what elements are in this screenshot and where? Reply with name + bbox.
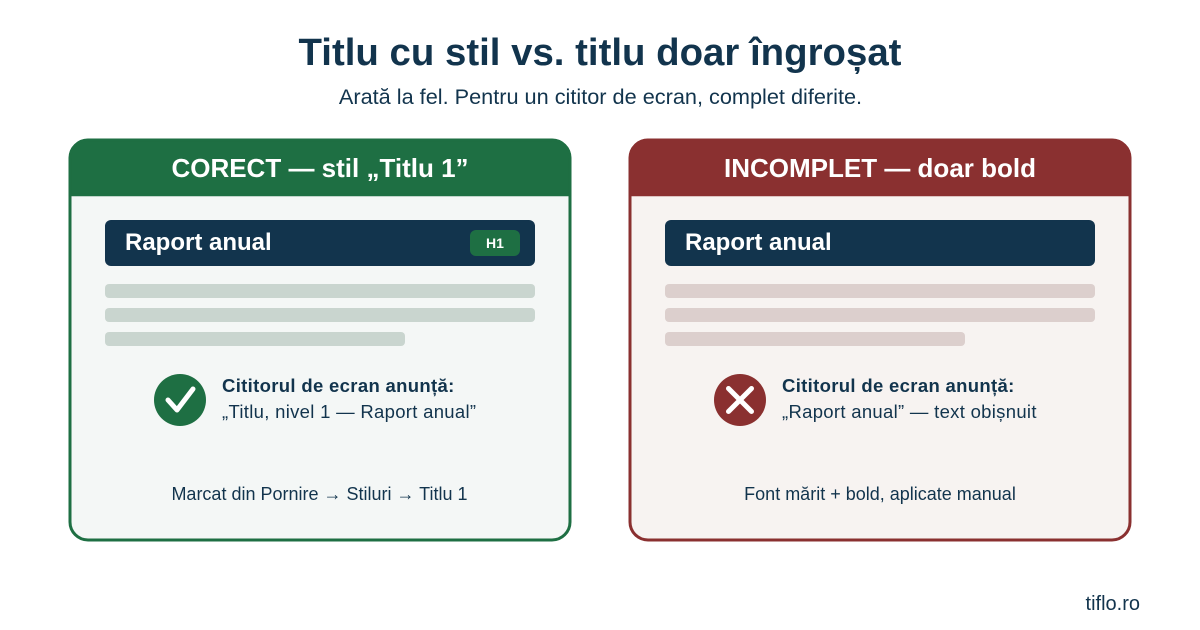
panel header: incomplete: INCOMPLET — doar bold [724,153,1036,183]
heading bar: Raport anual with H1 [105,220,535,266]
panel header: correct: CORECT — stil „Titlu 1” [171,153,469,183]
placeholder text lines [105,284,535,346]
subtitle: Arată la fel. Pentru un cititor de ecran, complet diferite. [339,84,862,109]
screen reader announcement: correct: Cititorul de ecran anunță: [222,375,455,396]
screen reader announcement: incomplete: „Raport anual” — text obișnuit [782,401,1037,422]
screen reader announcement: incomplete [782,375,1037,422]
panel: incomplete [630,140,1130,540]
panel: correct [70,140,570,540]
panel header: incomplete [630,140,1130,195]
icon: check mark [154,374,206,426]
heading bar: Raport anual with H1: Raport anual [125,229,272,256]
icon: cross mark [714,374,766,426]
placeholder text lines [665,284,1095,346]
title: Titlu cu stil vs. titlu doar îngroșat [299,31,902,74]
badge: H1 [470,230,520,256]
screen reader announcement: correct [222,375,476,422]
screen reader announcement: incomplete: Cititorul de ecran anunță: [782,375,1015,396]
screen reader announcement: correct: „Titlu, nivel 1 — Raport anual” [222,401,476,422]
panel header: correct [70,140,570,195]
heading bar: Raport anual: Raport anual [685,229,832,256]
footnote: correct: Marcat din Pornire → Stiluri → Titlu 1 [171,484,468,504]
footnote: incomplete: Font mărit + bold, aplicate manual [744,484,1016,504]
badge: H1: H1 [486,235,504,251]
source credit: tiflo.ro [1086,593,1140,615]
heading bar: Raport anual [665,220,1095,266]
